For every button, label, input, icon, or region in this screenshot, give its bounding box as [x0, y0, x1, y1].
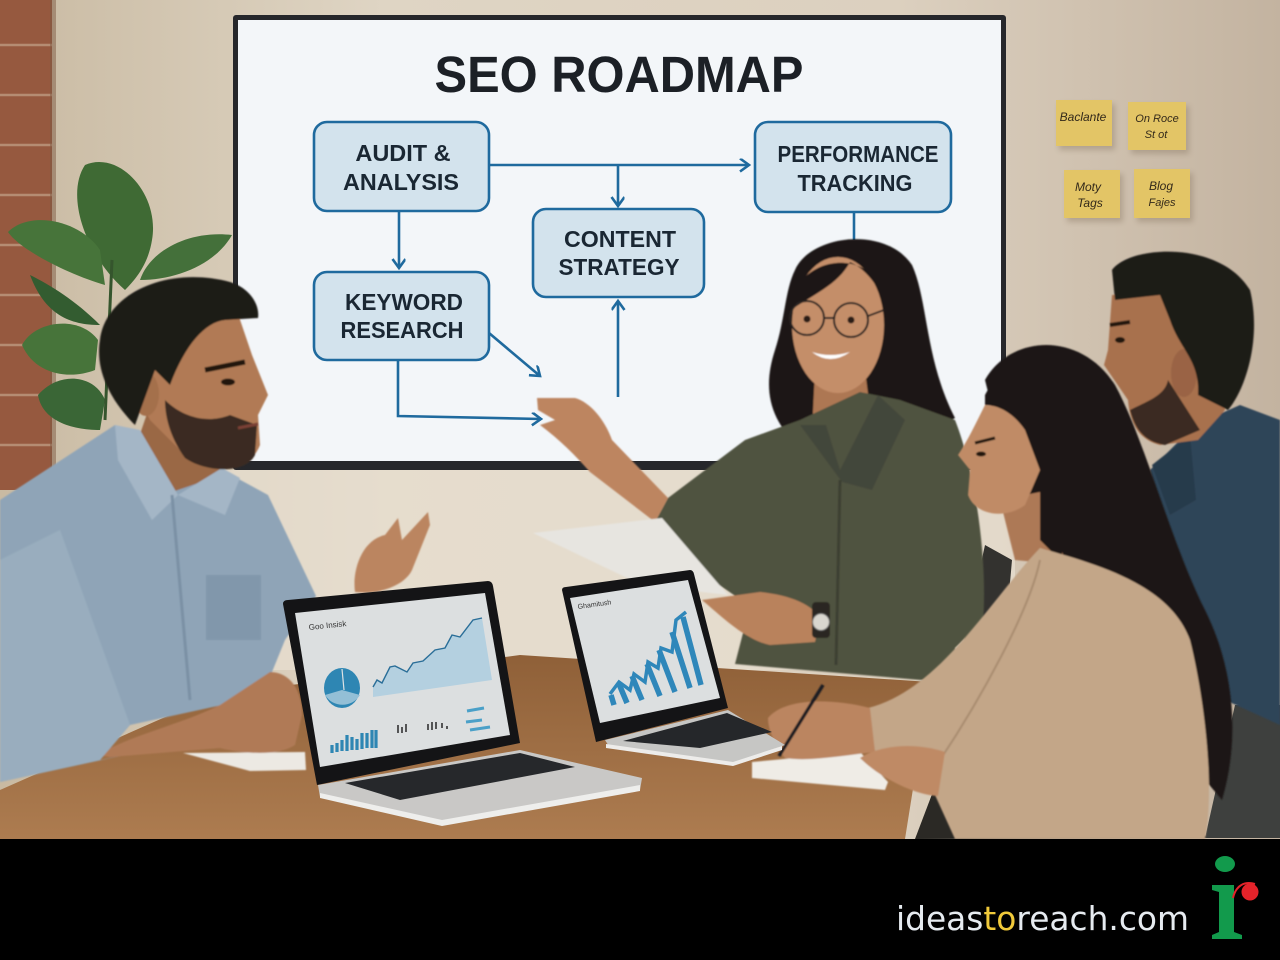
meeting table	[0, 655, 930, 839]
box: content strategy: CONTENT	[564, 226, 677, 252]
potted plant leaves	[8, 162, 232, 430]
sticky note: On Roce St ot	[1128, 102, 1189, 154]
sticky note: Baclante: Baclante	[1060, 110, 1107, 124]
handout paper	[533, 518, 728, 595]
face	[130, 305, 268, 469]
person: man at left in blue shirt	[0, 277, 430, 782]
notebook under hand	[183, 752, 306, 771]
dashboard heading: Goo Insisk	[308, 619, 348, 632]
writing hand with pen	[768, 685, 875, 759]
lower wall highlight	[215, 470, 1015, 670]
sticky note: On Roce St ot: On Roce	[1135, 113, 1179, 125]
rising bars	[610, 612, 701, 705]
presenter lower hand and watch	[702, 592, 830, 645]
sticky notes	[1056, 100, 1193, 222]
box: performance tracking	[755, 122, 951, 212]
resting hand	[860, 746, 945, 796]
dark chair behind right seats	[915, 545, 1280, 839]
sticky note: Moty Tags	[1064, 170, 1123, 222]
box: audit and analysis: ANALYSIS	[343, 169, 459, 195]
box: performance tracking: PERFORMANCE	[778, 141, 938, 167]
small bar chart	[332, 730, 376, 753]
notebook	[752, 752, 888, 790]
presenter pointing hand	[537, 398, 668, 522]
box: content strategy: STRATEGY	[558, 254, 680, 280]
brand text: ideastoreach.com	[896, 899, 1189, 938]
box: content strategy	[533, 209, 704, 297]
box: keyword research: KEYWORD	[345, 289, 463, 315]
arrows between steps	[398, 165, 854, 419]
title: SEO ROADMAP: SEO ROADMAP	[434, 46, 804, 103]
footer band	[0, 839, 1280, 960]
box: keyword research: RESEARCH	[340, 317, 464, 343]
box: keyword research	[314, 272, 489, 360]
forearm and hand	[98, 672, 302, 757]
box: audit and analysis	[314, 122, 489, 211]
sticky note: Blog Fajes	[1134, 169, 1193, 222]
gesturing hand	[354, 512, 430, 593]
sticky note: Blog Fajes: Blog	[1149, 179, 1173, 193]
laptop: right with bar chart	[562, 570, 785, 766]
small stats	[398, 722, 447, 733]
pie chart	[324, 668, 360, 708]
wall monitor with SEO roadmap	[233, 15, 1006, 470]
brand logo	[1212, 856, 1258, 939]
sticky note: Moty Tags: Moty	[1075, 180, 1102, 194]
sticky note: Blog Fajes: Fajes	[1149, 197, 1176, 209]
hair	[99, 277, 258, 425]
sticky note: Moty Tags: Tags	[1077, 196, 1103, 210]
person: woman on right in beige sweater	[752, 345, 1232, 839]
progress bars	[466, 708, 490, 730]
person: man at far right in navy shirt	[1104, 252, 1280, 725]
box: audit and analysis: AUDIT &	[355, 140, 451, 166]
laptop: left with dashboard	[283, 581, 642, 826]
brick column	[0, 0, 56, 490]
box: performance tracking: TRACKING	[798, 170, 912, 196]
area chart	[373, 618, 492, 697]
person: presenter in olive shirt	[533, 239, 984, 684]
chart heading: Ghamitush	[577, 599, 612, 611]
sticky note: On Roce St ot: St ot	[1145, 129, 1168, 141]
